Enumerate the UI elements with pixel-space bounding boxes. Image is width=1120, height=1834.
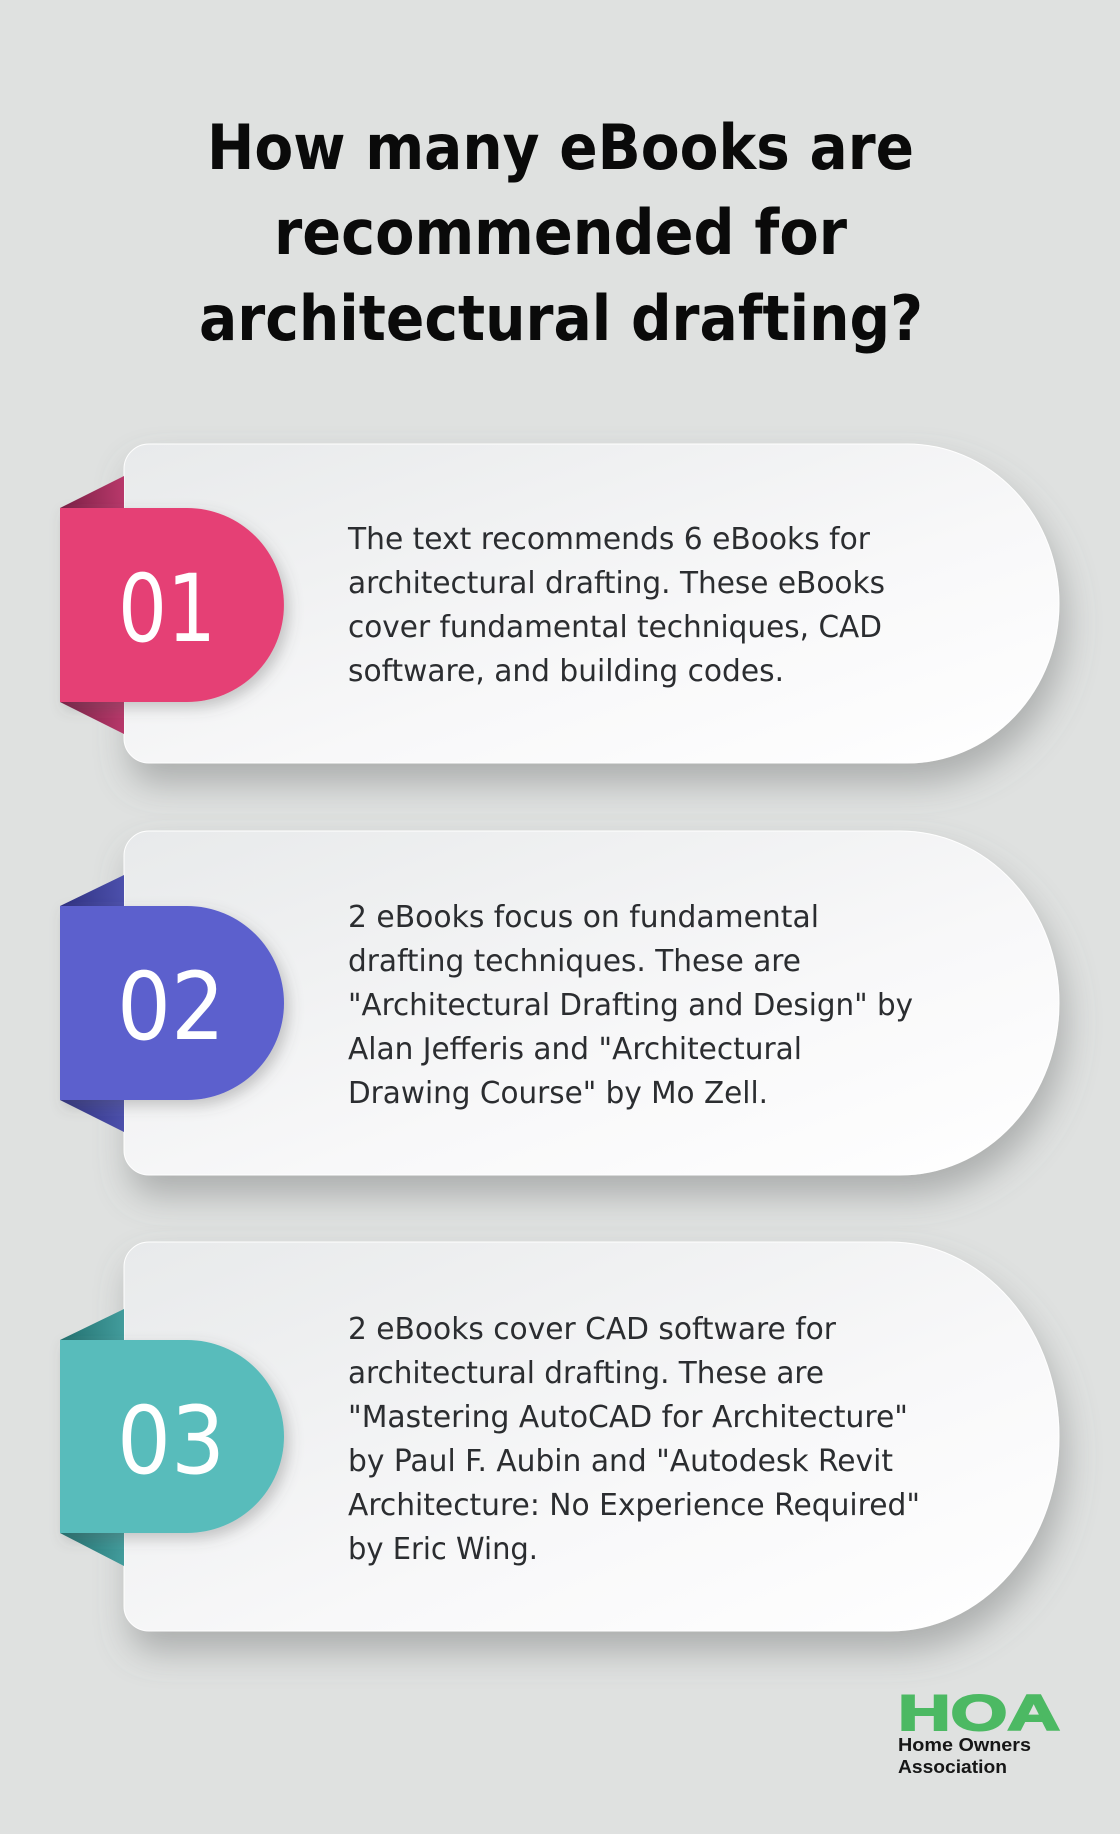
- number 02: 02: [117, 953, 225, 1062]
- ribbon fold top 02: [60, 875, 124, 906]
- logo: HOA: Association: [898, 1757, 1007, 1777]
- text 02: "Architectural Drafting and Design" by: [348, 988, 913, 1023]
- ribbon fold top 01: [60, 476, 124, 508]
- text 01: software, and building codes.: [348, 654, 784, 689]
- title: recommended for: [274, 196, 847, 269]
- text 02: Alan Jefferis and "Architectural: [348, 1032, 802, 1067]
- logo: HOA: [898, 1685, 1060, 1777]
- card 03 background: [124, 1242, 1059, 1631]
- ribbon fold bottom 02: [60, 1100, 124, 1132]
- title: [199, 111, 923, 355]
- text 03: 2 eBooks cover CAD software for: [348, 1312, 836, 1347]
- title: architectural drafting?: [199, 282, 923, 355]
- text 02: Drawing Course" by Mo Zell.: [348, 1076, 768, 1111]
- text 03: by Paul F. Aubin and "Autodesk Revit: [348, 1444, 893, 1479]
- logo: HOA: Home Owners: [898, 1735, 1031, 1755]
- text 03: "Mastering AutoCAD for Architecture": [348, 1400, 908, 1435]
- card 02 background: [124, 831, 1059, 1175]
- number tab 02: [60, 906, 284, 1100]
- text 03: by Eric Wing.: [348, 1532, 538, 1567]
- text 01: [347, 522, 885, 689]
- panel: step 03: [60, 1242, 1059, 1631]
- ribbon fold bottom 01: [60, 702, 124, 734]
- text 02: drafting techniques. These are: [348, 944, 801, 979]
- text 02: 2 eBooks focus on fundamental: [348, 900, 819, 935]
- text 03: Architecture: No Experience Required": [348, 1488, 920, 1523]
- number tab 01: [60, 508, 284, 702]
- text 01: The text recommends 6 eBooks for: [347, 522, 870, 557]
- number 01: 01: [118, 555, 216, 664]
- number tab 03: [60, 1340, 284, 1533]
- text 03: architectural drafting. These are: [348, 1356, 824, 1391]
- panel: step 02: [60, 831, 1059, 1175]
- card 01 background: [124, 444, 1059, 763]
- number 03: 03: [117, 1387, 225, 1496]
- ribbon fold bottom 03: [60, 1533, 124, 1566]
- title: How many eBooks are: [207, 111, 914, 184]
- ribbon fold top 03: [60, 1309, 124, 1340]
- text 03: [348, 1312, 920, 1567]
- text 01: architectural drafting. These eBooks: [348, 566, 885, 601]
- text 01: cover fundamental techniques, CAD: [348, 610, 882, 645]
- text 02: [348, 900, 913, 1111]
- logo: HOA: HOA: [898, 1685, 1060, 1741]
- panel: step 01: [60, 444, 1059, 763]
